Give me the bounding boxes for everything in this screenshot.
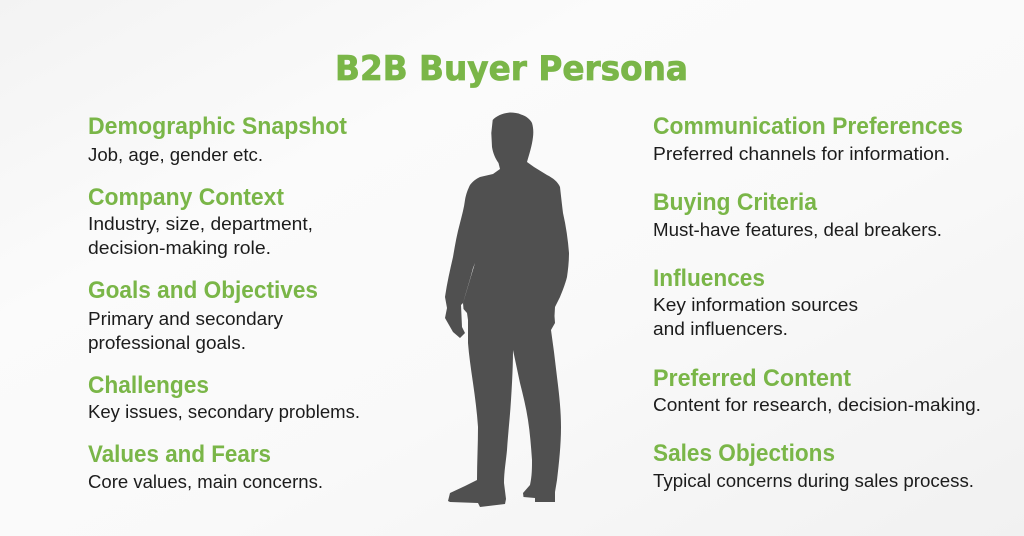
item: influences: and influencers. (653, 319, 788, 339)
item: influences: Key information sources (653, 295, 858, 315)
item: demographic snapshot (88, 113, 347, 165)
item: values and fears: Core values, main concerns. (88, 472, 323, 492)
item: preferred content: Preferred Content (653, 365, 851, 392)
item: goals and objectives (88, 277, 318, 353)
item: buying criteria: Must-have features, deal breakers. (653, 220, 942, 240)
item: preferred content: Content for research, decision-making. (653, 395, 981, 415)
item: buying criteria (653, 189, 942, 240)
item: goals and objectives: Primary and secondary (88, 309, 283, 329)
item: values and fears: Values and Fears (88, 441, 271, 468)
item: company context: decision-making role. (88, 238, 271, 258)
panel: left persona attributes (88, 113, 360, 492)
item: challenges: Key issues, secondary problems. (88, 402, 360, 422)
item: communication preferences (653, 113, 963, 164)
item: communication preferences: Preferred channels for information. (653, 144, 950, 164)
item: sales objections (653, 440, 974, 491)
item: sales objections: Sales Objections (653, 440, 835, 467)
item: preferred content (653, 365, 981, 415)
item: company context: Industry, size, department, (88, 214, 313, 234)
item: demographic snapshot: Demographic Snapshot (88, 113, 347, 140)
item: buying criteria: Buying Criteria (653, 189, 818, 216)
item: company context: Company Context (88, 184, 284, 211)
item: goals and objectives: Goals and Objectives (88, 277, 318, 304)
panel: right persona attributes (653, 113, 981, 491)
item: goals and objectives: professional goals. (88, 333, 246, 353)
item: challenges (88, 372, 360, 422)
item: influences: Influences (653, 265, 765, 292)
title: B2B Buyer Persona (335, 49, 688, 89)
item: challenges: Challenges (88, 372, 209, 399)
item: communication preferences: Communication Preferences (653, 113, 963, 140)
item: company context (88, 184, 313, 258)
item: sales objections: Typical concerns during sales process. (653, 471, 974, 491)
item: influences (653, 265, 858, 339)
item: demographic snapshot: Job, age, gender etc. (88, 145, 263, 165)
item: values and fears (88, 441, 323, 492)
icon: standing man silhouette (445, 112, 569, 507)
